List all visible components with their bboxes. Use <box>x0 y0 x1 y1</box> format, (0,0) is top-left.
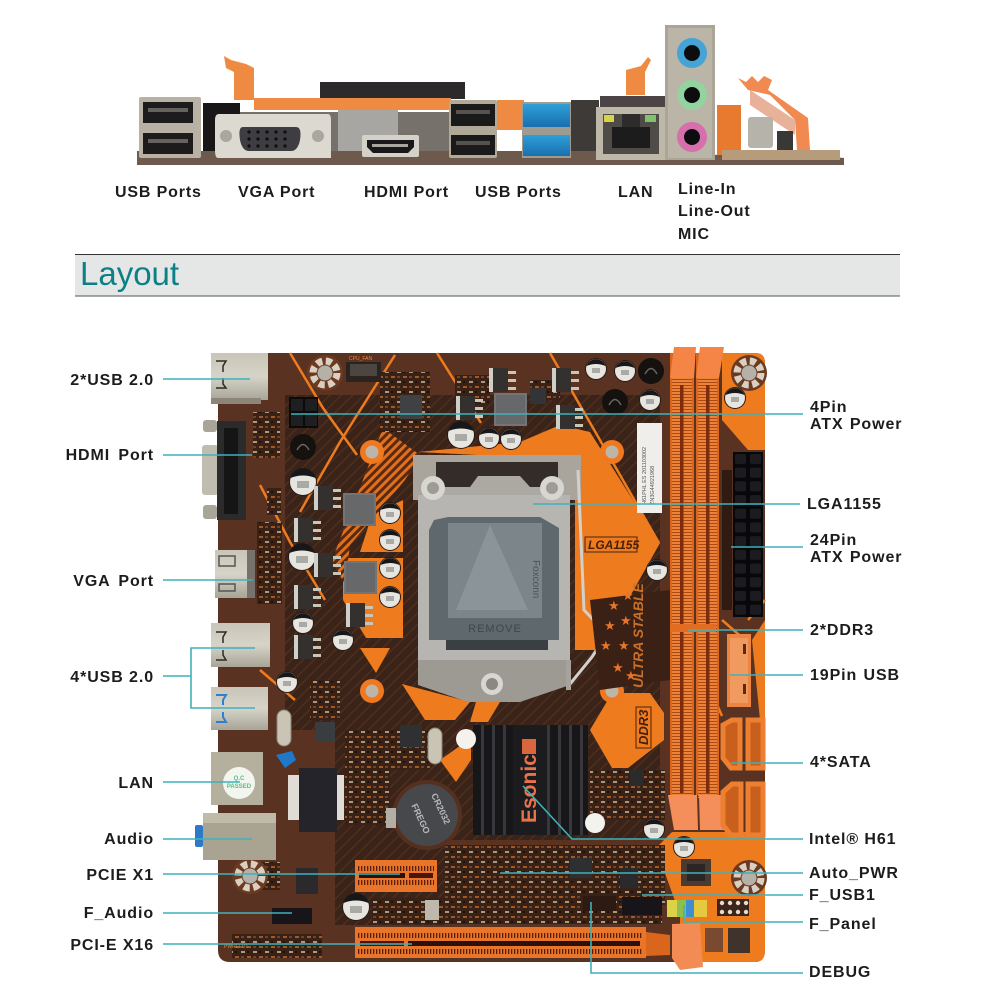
heatsink mounting holes <box>232 355 767 896</box>
vrm and misc ic <box>296 770 750 953</box>
serial sticker: ZN3G44921968 <box>650 466 656 505</box>
right labels: LGA1155 <box>807 496 882 513</box>
silkscreen: ultra stable: ★ <box>612 661 624 676</box>
left labels: 2*USB 2.0 <box>70 372 154 389</box>
smd component clusters <box>232 372 665 958</box>
usb 2.0 top port <box>211 353 268 404</box>
right labels: F_USB1 <box>809 887 876 904</box>
silkscreen: ultra stable: ★ <box>620 614 632 629</box>
front audio header <box>224 908 312 950</box>
front panel colored pins <box>667 900 707 917</box>
right labels: 24Pin <box>810 532 857 549</box>
left leader lines <box>163 379 412 944</box>
top port labels: LAN <box>618 184 653 201</box>
right labels: Auto_PWR <box>809 865 899 882</box>
silkscreen: ultra stable: ★ <box>622 589 634 604</box>
audio port side <box>195 813 276 860</box>
capacitors <box>276 358 746 921</box>
front audio header: PWRLED1 <box>224 944 248 950</box>
silkscreen: ultra stable: ★ <box>625 669 637 684</box>
top port labels: VGA Port <box>238 184 315 201</box>
silkscreen: DDR3: DDR3 <box>636 709 651 745</box>
hdmi port <box>362 135 419 157</box>
usb ports middle <box>449 100 497 158</box>
left labels: HDMI Port <box>66 447 154 464</box>
latches and rear background <box>203 56 668 158</box>
chipset heatsink: Esonic <box>518 754 541 823</box>
right labels: 4Pin <box>810 399 847 416</box>
heading: Layout: Layout <box>80 255 179 292</box>
top port labels <box>115 181 751 243</box>
top port labels: USB Ports <box>475 184 562 201</box>
audio controller chip <box>288 722 422 832</box>
mosfets <box>294 368 583 659</box>
24-pin atx connector <box>722 452 763 617</box>
bios battery <box>386 780 462 850</box>
motherboard <box>195 347 767 970</box>
silkscreen: ultra stable: ★ <box>600 639 612 654</box>
left labels: Audio <box>104 831 154 848</box>
right labels: F_Panel <box>809 916 877 933</box>
pcie x1 slot <box>355 860 437 892</box>
silkscreen: LGA1155: LGA1155 <box>588 538 639 552</box>
white pin header <box>717 899 749 916</box>
left labels: PCI-E X16 <box>70 937 154 954</box>
lan port side with sticker: PASSED <box>227 784 252 790</box>
4-pin power connector <box>289 397 318 428</box>
right labels: ATX Power <box>810 416 902 433</box>
right labels: 19Pin USB <box>810 667 900 684</box>
usb 3 side port <box>211 687 268 730</box>
silkscreen: ultra stable: ULTRA STABLE <box>630 583 646 688</box>
crystals <box>277 710 442 764</box>
bios battery: CR2032 <box>429 792 452 826</box>
serial sticker: H61PHL ES 201103002 <box>642 447 648 505</box>
top port labels: Line-Out <box>678 203 751 220</box>
top port labels: USB Ports <box>115 184 202 201</box>
sata connectors <box>723 720 763 835</box>
debug and usb headers <box>583 896 662 915</box>
chipset heatsink <box>456 725 605 835</box>
lan port side with sticker: Q.C <box>234 776 245 782</box>
inductors <box>343 388 546 594</box>
usb 3 ports <box>522 102 571 158</box>
top port labels: MIC <box>678 226 710 243</box>
usb ports left <box>139 97 201 158</box>
silkscreen: ultra stable <box>590 583 670 690</box>
usb 2.0 lower port <box>211 623 270 667</box>
right edge parts <box>717 76 840 160</box>
top port labels: Line-In <box>678 181 736 198</box>
silkscreen: ultra stable: ★ <box>618 639 630 654</box>
top port labels: HDMI Port <box>364 184 449 201</box>
cpu fan header: CPU_FAN <box>349 356 372 362</box>
heading: Layout <box>75 254 900 296</box>
vga connector side <box>202 420 246 520</box>
orange copper zones <box>343 353 765 962</box>
vga port <box>215 114 331 158</box>
bios battery: FREGO <box>409 802 432 835</box>
silkscreen: ultra stable: ★ <box>604 619 616 634</box>
19-pin usb header <box>727 634 751 707</box>
serial sticker <box>637 423 662 513</box>
audio jack bracket <box>665 25 715 160</box>
cpu socket: Foxconn <box>530 560 541 598</box>
silkscreen: ultra stable: ★ <box>608 599 620 614</box>
left labels: LAN <box>118 775 154 792</box>
right labels <box>807 399 902 981</box>
pcb edge <box>137 151 844 165</box>
right labels: 4*SATA <box>810 754 872 771</box>
left labels: 4*USB 2.0 <box>70 669 154 686</box>
cpu socket: REMOVE <box>468 623 522 635</box>
trace lines <box>260 353 765 885</box>
left labels: F_Audio <box>84 905 154 922</box>
cpu socket <box>413 455 607 702</box>
right labels: DEBUG <box>809 964 871 981</box>
lan port <box>596 107 665 160</box>
right labels: ATX Power <box>810 549 902 566</box>
right leader lines <box>291 414 803 973</box>
ddr3 slots <box>668 347 724 830</box>
top rear I/O photo <box>137 25 844 165</box>
left labels <box>66 372 154 954</box>
pcb base <box>218 353 765 962</box>
blue capacitor <box>276 751 296 768</box>
pcie x16 slot <box>355 923 703 970</box>
woven trace texture <box>285 395 660 925</box>
right labels: 2*DDR3 <box>810 622 874 639</box>
hatched copper zone <box>332 428 420 585</box>
right labels: Intel® H61 <box>809 831 896 848</box>
left labels: VGA Port <box>73 573 154 590</box>
hdmi connector side <box>215 550 255 598</box>
left labels: PCIE X1 <box>86 867 154 884</box>
cpu fan header <box>346 356 381 382</box>
lan port side with sticker <box>211 752 263 805</box>
